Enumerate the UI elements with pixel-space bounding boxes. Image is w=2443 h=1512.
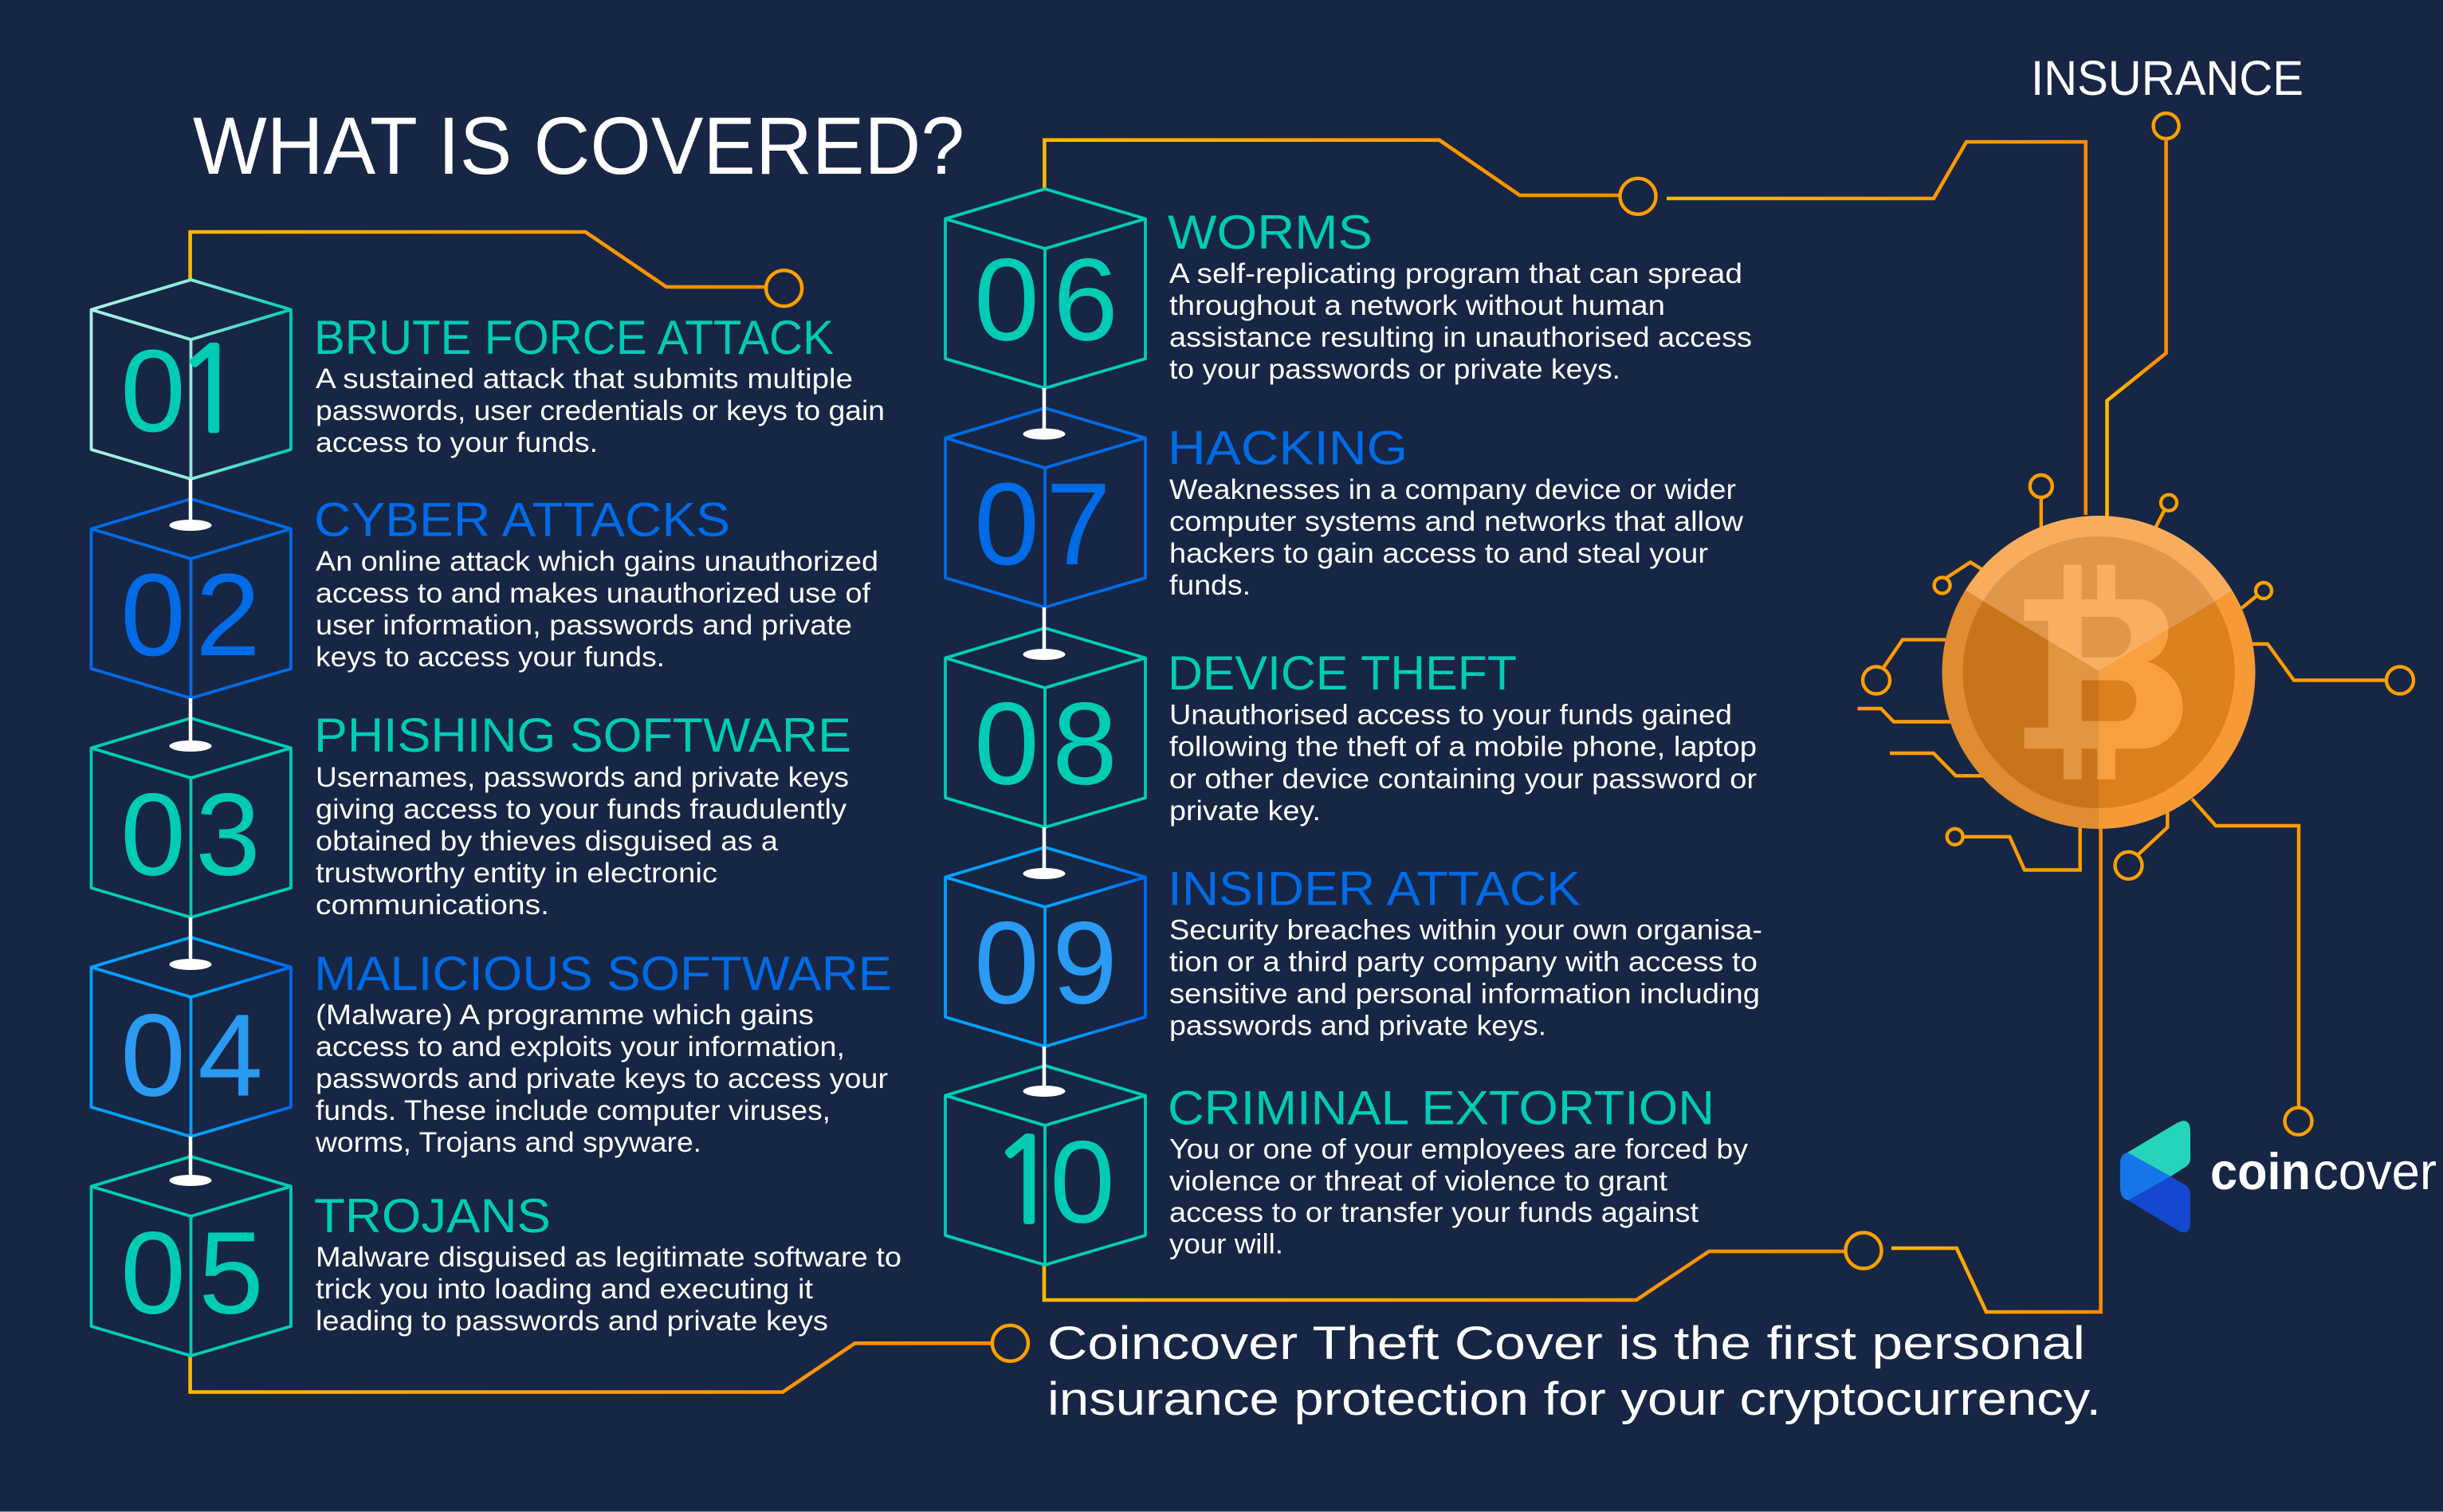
panel: item 02 cyber attacks (91, 479, 878, 698)
body text: leading to passwords and private keys (316, 1305, 828, 1337)
label: insurance: INSURANCE (2031, 51, 2304, 105)
statement: insurance protection for your cryptocurrency. (1047, 1373, 2101, 1425)
body text: private key. (1169, 795, 1321, 827)
connector dot (1023, 1047, 1065, 1097)
number 10: 1 (990, 1122, 1061, 1240)
connector dot (169, 1137, 212, 1186)
number 02: 02 (120, 550, 261, 681)
body text: funds. These include computer viruses, (316, 1094, 831, 1126)
cube 09 (945, 847, 1145, 1047)
body text: computer systems and networks that allow (1169, 505, 1743, 537)
body text: Usernames, passwords and private keys (316, 761, 849, 793)
body text (316, 1241, 901, 1337)
panel: item 09 insider attack (945, 827, 1762, 1047)
cube 05 (91, 1157, 291, 1356)
body text: sensitive and personal information including (1169, 977, 1760, 1009)
body text: obtained by thieves disguised as a (316, 825, 778, 857)
heading: WORMS (1168, 206, 1373, 259)
body text: user information, passwords and private (316, 609, 852, 641)
body text: passwords and private keys to access your (316, 1062, 888, 1094)
body text: violence or threat of violence to grant (1169, 1165, 1667, 1197)
heading: CYBER ATTACKS (314, 493, 730, 547)
body text: funds. (1169, 569, 1251, 601)
connector: top of cube 01 to node (190, 232, 802, 306)
connector dot (169, 917, 212, 970)
body text: Malware disguised as legitimate software to (316, 1241, 901, 1273)
title: WHAT IS COVERED? (193, 100, 964, 191)
number 03: 03 (120, 770, 261, 901)
panel: item 04 malicious software (91, 917, 892, 1158)
heading: CRIMINAL EXTORTION (1168, 1081, 1714, 1135)
number 06: 06 (974, 234, 1118, 365)
number 09: 09 (974, 897, 1117, 1028)
body text: following the theft of a mobile phone, laptop (1169, 730, 1757, 762)
body text (1169, 473, 1743, 601)
body text (315, 999, 888, 1158)
connector: bottom of cube 10 through node to coin (1044, 829, 2101, 1312)
connector dot (169, 698, 212, 752)
number 10: 0 (1050, 1117, 1115, 1248)
heading: DEVICE THEFT (1168, 646, 1517, 700)
icon: bitcoin coin (1942, 516, 2256, 829)
body text: A sustained attack that submits multiple (316, 363, 853, 395)
body text: worms, Trojans and spyware. (315, 1126, 701, 1158)
body text (316, 363, 885, 458)
cube 06 (945, 189, 1145, 388)
number 07: 07 (974, 459, 1111, 590)
body text: keys to access your funds. (316, 641, 665, 673)
body text: access to and makes unauthorized use of (316, 577, 870, 609)
body text: throughout a network without human (1169, 289, 1665, 321)
body text: Unauthorised access to your funds gained (1169, 698, 1732, 730)
heading: INSIDER ATTACK (1168, 862, 1581, 915)
logo mark (2120, 1121, 2190, 1232)
body text (316, 761, 849, 921)
logo wordmark: coin (2210, 1142, 2311, 1200)
body text: passwords, user credentials or keys to gain (316, 395, 885, 426)
body text: access to or transfer your funds against (1169, 1196, 1699, 1228)
body text: Weaknesses in a company device or wider (1169, 473, 1736, 505)
number 01: 0 (120, 326, 186, 457)
cube 02 (91, 499, 291, 698)
cube 04 (91, 937, 291, 1137)
body text: giving access to your funds fraudulently (316, 793, 846, 825)
body text: to your passwords or private keys. (1169, 353, 1620, 385)
body text: Security breaches within your own organisa- (1169, 913, 1762, 945)
body text: passwords and private keys. (1169, 1009, 1546, 1041)
logo wordmark (2210, 1142, 2437, 1200)
body text: or other device containing your password or (1169, 763, 1757, 795)
cube 07 (945, 408, 1145, 607)
number 08: 08 (974, 679, 1117, 810)
cube 03 (91, 718, 291, 917)
connector dot (1023, 607, 1065, 660)
body text: your will. (1169, 1227, 1283, 1259)
cube 01 (91, 280, 291, 479)
connector dot (1023, 827, 1065, 879)
panel: item 03 phishing software (91, 698, 851, 921)
body text: access to and exploits your information, (316, 1031, 845, 1062)
body text: access to your funds. (316, 426, 598, 458)
body text: An online attack which gains unauthorized (316, 545, 878, 577)
body text (1169, 913, 1762, 1041)
heading: PHISHING SOFTWARE (314, 709, 851, 762)
number 04: 04 (120, 990, 263, 1121)
body text: A self-replicating program that can spread (1169, 257, 1742, 289)
body text: communications. (316, 889, 549, 921)
connector: top of cube 06 through node to coin (1044, 140, 2086, 515)
panel: item 10 criminal extortion (945, 1047, 1748, 1265)
logo: coincover (2120, 1121, 2437, 1232)
body text: trick you into loading and executing it (316, 1273, 813, 1305)
body text: You or one of your employees are forced by (1169, 1133, 1748, 1165)
panel: item 06 worms (945, 189, 1752, 388)
number 10 (990, 1117, 1115, 1248)
body text: assistance resulting in unauthorised access (1169, 321, 1752, 353)
logo wordmark: cover (2313, 1142, 2437, 1200)
body text (1169, 698, 1757, 827)
body text: trustworthy entity in electronic (316, 857, 717, 889)
panel: item 08 device theft (945, 607, 1757, 827)
heading: TROJANS (314, 1189, 551, 1243)
body text (1169, 257, 1752, 385)
panel: item 01 brute force attack (91, 280, 885, 479)
statement: Coincover Theft Cover is the first personal (1047, 1318, 2085, 1369)
number 01 (120, 326, 245, 457)
connector dot (169, 479, 212, 531)
heading: BRUTE FORCE ATTACK (314, 311, 834, 364)
heading: HACKING (1168, 421, 1408, 475)
heading: MALICIOUS SOFTWARE (314, 947, 892, 1000)
body text: tion or a third party company with access to (1169, 945, 1758, 977)
body text (1169, 1133, 1748, 1259)
statement (1047, 1318, 2101, 1425)
cube 08 (945, 628, 1145, 827)
number 01: 1 (175, 332, 245, 449)
connector: bottom of cube 05 to statement node (190, 1325, 1028, 1392)
number 05: 05 (120, 1208, 264, 1339)
cube 10 (945, 1066, 1145, 1265)
coin circuit traces (1858, 475, 2414, 1135)
body text: (Malware) A programme which gains (316, 999, 814, 1031)
connector: insurance node to coin (2107, 113, 2179, 516)
panel: item 07 hacking (945, 388, 1743, 607)
body text (316, 545, 878, 673)
panel: item 05 trojans (91, 1137, 901, 1356)
body text: hackers to gain access to and steal your (1169, 537, 1708, 569)
connector dot (1023, 388, 1065, 440)
